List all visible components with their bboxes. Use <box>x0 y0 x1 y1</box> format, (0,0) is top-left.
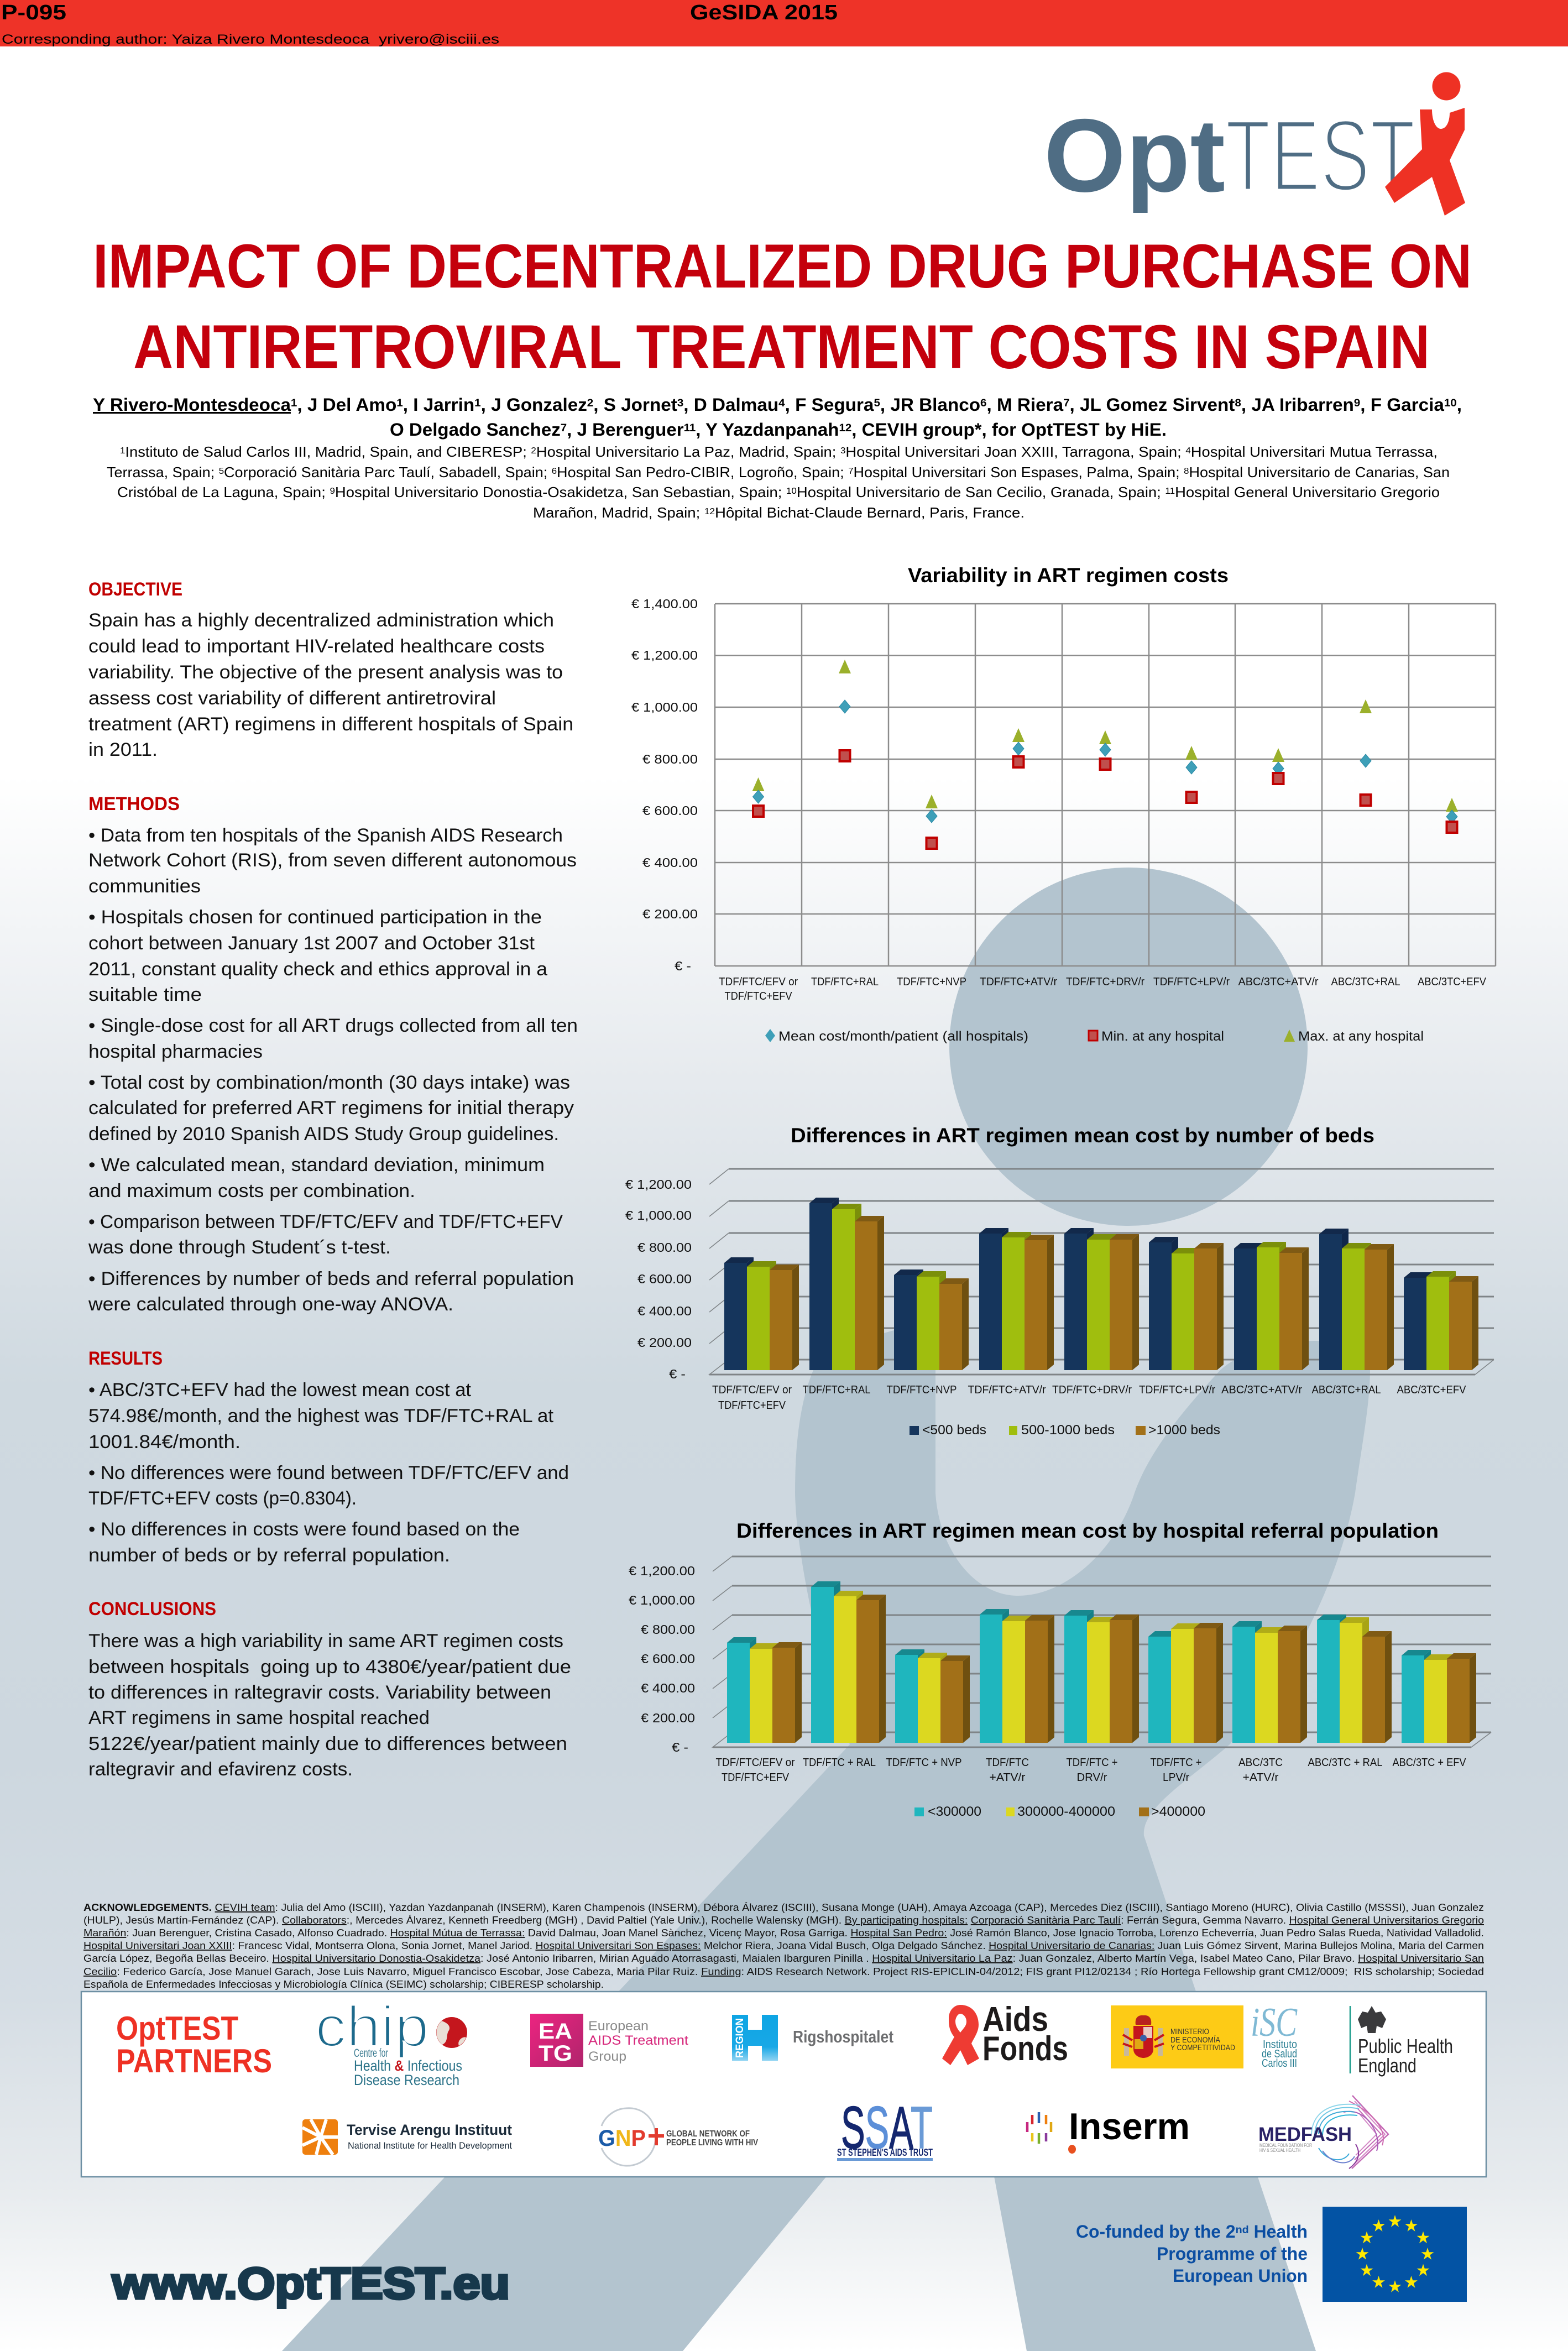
x axis labels: ABC/3TC+ATV/r <box>1221 1384 1302 1396</box>
OptTEST logo: Opt <box>1044 97 1225 213</box>
text: conclusions: between hospitals going up to 4380€/year/patient due <box>88 1657 571 1678</box>
logo: EATG: Group <box>588 2049 626 2064</box>
y axis labels: € 800.00 <box>641 1622 695 1637</box>
authors <box>93 395 1462 440</box>
co-funding statement: Programme of the <box>1157 2244 1308 2264</box>
legend: >1000 beds <box>1148 1423 1220 1438</box>
panel: partner logos <box>81 1992 1486 2177</box>
text: results: • No differences were found between TDF/FTC/EFV and <box>88 1462 569 1483</box>
affiliations: Cristóbal de La Laguna, Spain; 9Hospital Universitario Donostia-Osakidetza, San Sebastian, Spain; 10Hospital Universitario de San Cecilio, Granada, Spain; 11Hospital General Universitario Gregorio <box>117 484 1440 500</box>
text: objective: Spain has a highly decentralized administration which <box>88 610 554 631</box>
x axis labels: TDF/FTC+LPV/r <box>1139 1384 1215 1396</box>
y axis labels: € 200.00 <box>637 1335 692 1350</box>
mean markers <box>753 700 1457 823</box>
x axis labels: TDF/FTC/EFV or <box>715 1757 795 1769</box>
acknowledgements: Marañón: Juan Berenguer, Cristina Casado, Alfonso Cuadrado. Hospital Mútua de Terrassa: David Dalmau, Joan Manel Sànchez, Vicenç Mayor, Rosa Garriga. Hospital San Pedro: José Ramón Blanco, Jose Ignacio Torroba, Lorenzo Echeverría, Juan Pedro Salas Rueda, Natividad Valladolid. <box>83 1927 1484 1939</box>
affiliations: Terrassa, Spain; 5Corporació Sanitària Parc Taulí, Sabadell, Spain; 6Hospital San Pedro-CIBIR, Logroño, Spain; 7Hospital Universitari Son Espases, Palma, Spain; 8Hospital Universitario de Canarias, San <box>107 464 1450 480</box>
OptTEST logo <box>1044 72 1465 216</box>
poster number: P-095 <box>1 1 66 24</box>
text: objective: assess cost variability of different antiretroviral <box>88 688 496 709</box>
x axis labels: DRV/r <box>1077 1772 1107 1784</box>
logo: Region H Rigshospitalet: REGION <box>734 2018 746 2058</box>
logo: Tervise Arengu Instituut: National Institute for Health Development <box>348 2140 512 2151</box>
x axis labels: TDF/FTC+ATV/r <box>980 976 1057 988</box>
logo: Inserm: Inserm <box>1069 2106 1190 2148</box>
bars: 300000-400000 <box>750 1591 1454 1743</box>
legend: 500-1000 beds <box>1021 1423 1115 1438</box>
y axis labels: € 1,200.00 <box>631 648 698 662</box>
text: methods: Network Cohort (RIS), from seven different autonomous <box>88 850 577 871</box>
min markers <box>753 750 1457 849</box>
panel: objective <box>88 579 573 760</box>
acknowledgements <box>83 1901 1484 1990</box>
acknowledgements: Española de Enfermedades Infecciosas y Microbiología Clínica (SEIMC) scholarship; CIBERESP scholarship. <box>83 1978 604 1990</box>
text: results: • ABC/3TC+EFV had the lowest mean cost at <box>88 1380 472 1401</box>
x axis labels: TDF/FTC/EFV or <box>719 976 798 988</box>
logo: EATG <box>530 2014 688 2067</box>
y axis labels: € 600.00 <box>637 1272 692 1286</box>
text: results: • No differences in costs were found based on the <box>88 1519 520 1540</box>
y axis labels: € 600.00 <box>641 1652 695 1666</box>
logo: Ministerio de Economía: MINISTERIO <box>1170 2027 1209 2036</box>
x axis labels: TDF/FTC+RAL <box>803 1384 870 1396</box>
panel: conclusions <box>88 1598 571 1780</box>
logo: MEDFASH: MEDFASH <box>1258 2124 1352 2145</box>
x axis labels <box>719 976 1487 1002</box>
legend: Max. at any hospital <box>1298 1029 1424 1044</box>
logo: CHIP: Disease Research <box>354 2072 459 2088</box>
y axis labels: € - <box>669 1367 686 1381</box>
logo: Aids Fonds: Fonds <box>982 2030 1068 2068</box>
text: objective: could lead to important HIV-related healthcare costs <box>88 636 545 657</box>
text: conclusions <box>88 1631 571 1780</box>
logo: EATG: EA <box>539 2019 572 2044</box>
y axis labels: € 800.00 <box>637 1240 692 1255</box>
text: results <box>88 1380 569 1566</box>
logo: EATG: TG <box>539 2041 572 2066</box>
max markers <box>752 660 1458 812</box>
heading: methods: METHODS <box>88 793 180 814</box>
chart: cost by referral population <box>629 1519 1491 1819</box>
legend <box>910 1423 1220 1438</box>
x axis labels <box>715 1757 1466 1784</box>
text: methods: 2011, constant quality check and ethics approval in a <box>88 959 547 980</box>
x axis labels: ABC/3TC + RAL <box>1308 1757 1382 1769</box>
text: objective <box>88 610 573 760</box>
text: methods: calculated for preferred ART regimens for initial therapy <box>88 1098 574 1119</box>
logo: GNP+: PEOPLE LIVING WITH HIV <box>666 2138 758 2148</box>
y axis labels: € 400.00 <box>642 855 698 870</box>
logo: OptTEST Partners: PARTNERS <box>116 2042 272 2080</box>
heading: objective: OBJECTIVE <box>88 579 182 600</box>
acknowledgements: García López, Begoña Bellas Beceiro. Hospital Universitario Donostia-Osakidetza : José Antonio Iribarren, Mirian Aguado Atorrasagasti, Maialen Ibarguren Pinilla . Hospital Universitario La Paz : Juan Gonzalez, Alberto Martín Vega, Isabel Mateo Cano, Pilar Bravo. Hospital Universitario San <box>83 1952 1484 1964</box>
logo: EATG: European <box>588 2019 649 2034</box>
x axis labels: ABC/3TC+RAL <box>1331 976 1400 988</box>
x axis labels: ABC/3TC + EFV <box>1392 1757 1466 1769</box>
authors: Y Rivero-Montesdeoca 1, J Del Amo 1, I Jarrin1, J Gonzalez 2, S Jornet 3, D Dalmau 4, F Segura 5, JR Blanco 6, M Riera 7, JL Gomez Sirvent 8, JA Iribarren 9, F Garcia 10, <box>93 395 1462 415</box>
x axis labels: TDF/FTC+EFV <box>724 990 792 1002</box>
logo: CHIP: Health & Infectious <box>354 2057 462 2074</box>
logo: GNP+: GLOBAL NETWORK OF <box>666 2129 750 2139</box>
text: results: 574.98€/month, and the highest was TDF/FTC+RAL at <box>88 1406 554 1427</box>
x axis labels: TDF/FTC+RAL <box>811 976 879 988</box>
y axis labels: € 1,000.00 <box>625 1208 692 1222</box>
y axis labels: € 1,200.00 <box>625 1177 692 1192</box>
y axis labels <box>629 1564 695 1754</box>
x axis labels: TDF/FTC + <box>1150 1757 1202 1769</box>
x axis labels: ABC/3TC <box>1238 1757 1283 1769</box>
text: conclusions: to differences in raltegravir costs. Variability between <box>88 1682 551 1703</box>
logo: Ministerio de Economía: Y COMPETITIVIDAD <box>1170 2043 1235 2052</box>
logo: CHIP <box>315 1995 467 2088</box>
y axis labels: € 800.00 <box>642 752 698 766</box>
x axis labels: +ATV/r <box>990 1772 1026 1784</box>
logo: Instituto de Salud Carlos III: Instituto <box>1263 2039 1297 2051</box>
x axis labels: ABC/3TC+ATV/r <box>1238 976 1319 988</box>
text: methods: • Data from ten hospitals of the Spanish AIDS Research <box>88 825 563 846</box>
text: objective: variability. The objective of the present analysis was to <box>88 662 563 683</box>
legend: Mean cost/month/patient (all hospitals) <box>778 1029 1028 1044</box>
logo: St Stephen's AIDS Trust: ST STEPHEN'S AIDS TRUST <box>837 2147 933 2158</box>
y axis labels: € 1,000.00 <box>629 1593 695 1607</box>
text: methods: defined by 2010 Spanish AIDS Study Group guidelines. <box>88 1124 559 1145</box>
legend: <300000 <box>928 1804 981 1819</box>
x axis labels: TDF/FTC+EFV <box>718 1399 786 1412</box>
x axis labels: TDF/FTC + <box>1066 1757 1118 1769</box>
acknowledgements: Cecilio : Federico García, Jose Manuel Garach, Jose Luis Navarro, Miguel Francisco Escobar, Jose Cabeza, Maria Pilar Ruiz. Funding : AIDS Research Network. Project RIS-EPICLIN-04/2012; FIS grant PI12/02134 ; Río Hortega Fellowship grant CM12/0009; RIS scholarship; Sociedad <box>83 1966 1484 1977</box>
co-funding statement <box>1076 2222 1308 2286</box>
legend: <500 beds <box>922 1423 986 1438</box>
text: methods: were calculated through one-way ANOVA. <box>88 1294 453 1315</box>
text: methods: cohort between January 1st 2007 and October 31st <box>88 933 535 954</box>
acknowledgements: (HULP), Jesús Martín-Fernández (CAP). Collaborators :, Mercedes Álvarez, Kenneth Freedberg (MGH) , David Paltiel (Yale Univ.), Rochelle Walensky (MGH). By participating hospitals: Corporació Sanitària Parc Taulí : Ferrán Segura, Gemma Navarro. Hospital General Universitarios Gregorio <box>83 1914 1484 1926</box>
x axis labels: TDF/FTC+LPV/r <box>1153 976 1230 988</box>
text: results: number of beds or by referral population. <box>88 1545 450 1566</box>
OptTEST logo: TEST <box>1225 99 1415 213</box>
logo: EATG: AIDS Treatment <box>588 2033 688 2048</box>
text: methods: • Hospitals chosen for continued participation in the <box>88 907 542 928</box>
y axis labels: € 400.00 <box>637 1304 692 1318</box>
logo: Aids Fonds <box>942 2000 1068 2068</box>
logo: Ministerio de Economía <box>1111 2005 1243 2068</box>
x axis labels: ABC/3TC+EFV <box>1418 976 1487 988</box>
y axis labels <box>625 1177 692 1381</box>
legend: >400000 <box>1151 1804 1205 1819</box>
x axis labels <box>712 1384 1466 1412</box>
logo: Inserm <box>1027 2106 1190 2154</box>
affiliations: Marañon, Madrid, Spain; 12Hôpital Bichat-Claude Bernard, Paris, France. <box>533 504 1025 521</box>
bars: under 500 beds <box>724 1198 1433 1370</box>
co-funding statement: European Union <box>1173 2266 1308 2286</box>
logo: Instituto de Salud Carlos III: iSC <box>1251 2000 1298 2045</box>
logo: Tervise Arengu Instituut: Tervise Arengu Instituut <box>347 2122 512 2138</box>
conference name: GeSIDA 2015 <box>690 1 838 24</box>
text: methods: • Comparison between TDF/FTC/EFV and TDF/FTC+EFV <box>88 1211 563 1232</box>
text: methods: and maximum costs per combination. <box>88 1180 415 1201</box>
logo: MEDFASH <box>1258 2096 1388 2169</box>
x axis labels: ABC/3TC+EFV <box>1397 1384 1466 1396</box>
logo: GNP+: GNP <box>598 2125 646 2151</box>
text: objective: in 2011. <box>88 739 158 760</box>
y axis labels: € 600.00 <box>642 803 698 818</box>
logo: Aids Fonds: Aids <box>982 2000 1048 2039</box>
legend: 300000-400000 <box>1017 1804 1115 1819</box>
text: conclusions: raltegravir and efavirenz costs. <box>88 1759 353 1780</box>
logo: CHIP: Centre for <box>354 2047 388 2060</box>
legend <box>914 1804 1205 1819</box>
x axis labels: TDF/FTC+NVP <box>887 1384 957 1396</box>
text: results: 1001.84€/month. <box>88 1432 241 1453</box>
x axis labels: ABC/3TC+RAL <box>1311 1384 1381 1396</box>
y axis labels: € 1,000.00 <box>631 700 698 714</box>
x axis labels: TDF/FTC+NVP <box>897 976 966 988</box>
logo: Ministerio de Economía: DE ECONOMÍA <box>1170 2035 1220 2045</box>
x axis labels: TDF/FTC/EFV or <box>712 1384 792 1396</box>
title <box>93 232 1472 382</box>
bars: 500-1000 beds <box>747 1204 1456 1370</box>
legend <box>765 1029 1424 1044</box>
y axis labels: € - <box>675 959 691 973</box>
logo: Public Health England: England <box>1358 2054 1417 2077</box>
text: conclusions: There was a high variability in same ART regimen costs <box>88 1631 563 1652</box>
logo: MEDFASH: HIV & SEXUAL HEALTH <box>1259 2148 1300 2153</box>
text: methods: • We calculated mean, standard deviation, minimum <box>88 1154 545 1176</box>
text: methods: • Differences by number of beds and referral population <box>88 1268 574 1289</box>
logo: OptTEST Partners: OptTEST <box>116 2010 238 2047</box>
y axis labels: € 1,200.00 <box>629 1564 695 1578</box>
bars: over 400000 <box>772 1595 1476 1743</box>
text: methods: was done through Student´s t-test. <box>88 1237 391 1258</box>
x axis labels: TDF/FTC+EFV <box>722 1772 790 1784</box>
acknowledgements: Hospital Universitari Joan XXIII : Francesc Vidal, Montserra Olona, Sonia Jornet, Manel Jariod. Hospital Universitari Son Espases: Melchor Riera, Joana Vidal Busch, Olga Delgado Sánchez. Hospital Universitario de Canarias: Juan Luis Gómez Sirvent, Marina Bullejos Molina, Maria del Carmen <box>83 1940 1484 1951</box>
bars: over 1000 beds <box>770 1216 1478 1370</box>
heading: results: RESULTS <box>88 1348 163 1369</box>
affiliations <box>107 443 1450 521</box>
text: results: TDF/FTC+EFV costs (p=0.8304). <box>88 1488 357 1509</box>
logo: Instituto de Salud Carlos III: de Salud <box>1262 2048 1297 2060</box>
header band <box>0 0 1568 47</box>
co-funding statement: Co-funded by the 2nd Health <box>1076 2222 1308 2242</box>
chart title: Differences in ART regimen mean cost by number of beds <box>791 1124 1374 1147</box>
acknowledgements: ACKNOWLEDGEMENTS. CEVIH team : Julia del Amo (ISCIII), Yazdan Yazdanpanah (INSERM), Karen Champenois (INSERM), Débora Álvarez (ISCIII), Susana Monge (UAH), Amaya Azcoaga (CAP), Mercedes Diez (ISCIII), Santiago Moreno (HURC), Olivia Castillo (MSSSI), Juan Gonzalez <box>83 1901 1484 1913</box>
logo: Tervise Arengu Instituut <box>302 2119 512 2155</box>
y axis labels <box>631 597 698 973</box>
y axis labels: € 400.00 <box>641 1681 695 1695</box>
heading: conclusions: CONCLUSIONS <box>88 1598 216 1619</box>
x axis labels: TDF/FTC+DRV/r <box>1052 1384 1132 1396</box>
text: methods: • Single-dose cost for all ART drugs collected from all ten <box>88 1015 578 1036</box>
chart title: Variability in ART regimen costs <box>908 564 1229 587</box>
text: methods: • Total cost by combination/month (30 days intake) was <box>88 1072 570 1093</box>
text: methods: communities <box>88 876 201 897</box>
panel: results <box>88 1348 569 1566</box>
logo: Instituto de Salud Carlos III <box>1251 2000 1298 2070</box>
x axis labels: TDF/FTC + RAL <box>803 1757 876 1769</box>
x axis labels: TDF/FTC <box>986 1757 1029 1769</box>
website URL: www.OptTEST.eu <box>112 2259 510 2308</box>
text: objective: treatment (ART) regimens in different hospitals of Spain <box>88 714 573 735</box>
y axis labels: € 200.00 <box>642 907 698 921</box>
legend: Min. at any hospital <box>1101 1029 1224 1044</box>
corresponding author: Corresponding author: Yaiza Rivero Montesdeoca yrivero@isciii.es <box>2 32 499 47</box>
text: methods <box>88 825 578 1315</box>
logo: Region H Rigshospitalet: Rigshospitalet <box>793 2027 893 2046</box>
logo: St Stephen's AIDS Trust: SSAT <box>841 2094 933 2161</box>
x axis labels: TDF/FTC + NVP <box>886 1757 962 1769</box>
affiliations: 1Instituto de Salud Carlos III, Madrid, Spain, and CIBERESP; 2Hospital Universitario La Paz, Madrid, Spain; 3Hospital Universitari Joan XXIII, Tarragona, Spain; 4Hospital Universitari Mutua Terrassa, <box>120 443 1438 460</box>
chart title: Differences in ART regimen mean cost by hospital referral population <box>736 1519 1439 1542</box>
y axis labels: € 1,400.00 <box>631 597 698 611</box>
logo: MEDFASH: MEDICAL FOUNDATION FOR <box>1259 2143 1312 2148</box>
text: methods: suitable time <box>88 984 202 1005</box>
panel: methods <box>88 793 578 1315</box>
logo: GNP+ <box>598 2108 758 2166</box>
chart: cost by number of beds <box>625 1124 1494 1438</box>
y axis labels: € - <box>672 1740 688 1754</box>
logo: Instituto de Salud Carlos III: Carlos III <box>1262 2057 1297 2070</box>
logo: Public Health England <box>1350 2006 1453 2077</box>
bars: under 300000 <box>727 1581 1431 1743</box>
logo: Region H Rigshospitalet <box>732 2015 893 2061</box>
x axis labels: TDF/FTC+DRV/r <box>1066 976 1144 988</box>
authors: O Delgado Sanchez 7, J Berenguer 11, Y Yazdanpanah 12, CEVIH group*, for OptTEST by HiE. <box>390 420 1167 440</box>
x axis labels: +ATV/r <box>1243 1772 1279 1784</box>
x axis labels: LPV/r <box>1163 1772 1189 1784</box>
logo: CHIP: chip <box>315 1995 429 2059</box>
icon: EU flag <box>1323 2207 1467 2302</box>
text: methods: hospital pharmacies <box>88 1041 263 1062</box>
y axis labels: € 200.00 <box>641 1711 695 1725</box>
logo: Public Health England: Public Health <box>1358 2035 1453 2057</box>
background ribbon watermark <box>282 868 1370 2351</box>
chart: variability scatter <box>631 564 1496 1044</box>
title: ANTIRETROVIRAL TREATMENT COSTS IN SPAIN <box>133 312 1430 382</box>
text: conclusions: ART regimens in same hospital reached <box>88 1707 430 1728</box>
x axis labels: TDF/FTC+ATV/r <box>968 1384 1046 1396</box>
text: conclusions: 5122€/year/patient mainly due to differences between <box>88 1733 567 1754</box>
logo: OptTEST Partners <box>116 2010 272 2080</box>
